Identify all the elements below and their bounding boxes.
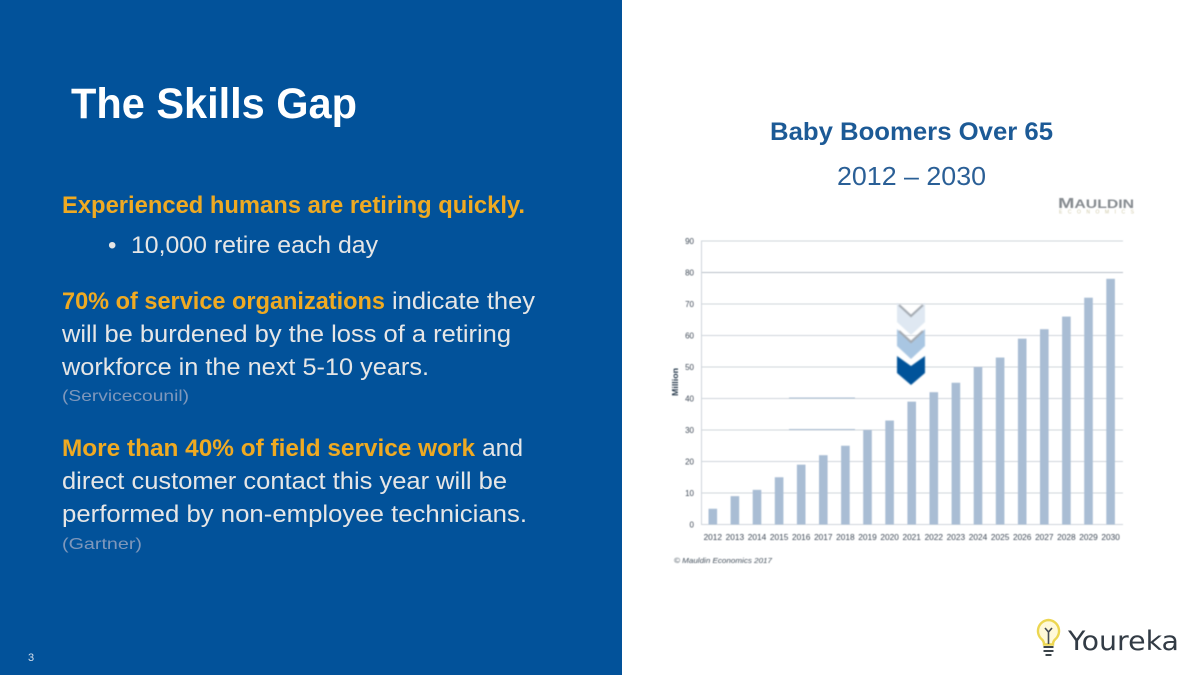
y axis labels: 30 — [685, 426, 695, 435]
text block: service organizations: workforce in the next 5-10 years. — [61, 354, 429, 381]
text block: retiring quickly: • — [108, 232, 116, 259]
y axis labels: 90 — [685, 237, 695, 246]
x axis labels: 2018 — [836, 532, 855, 542]
x axis labels: 2019 — [858, 532, 877, 542]
x axis labels: 2015 — [770, 532, 789, 542]
x axis labels: 2022 — [925, 532, 943, 542]
x axis labels: 2029 — [1079, 532, 1098, 542]
title: The Skills Gap — [71, 80, 357, 128]
y axis labels: 0 — [690, 520, 695, 530]
x axis labels: 2020 — [880, 532, 899, 542]
text block: field service work: and — [482, 435, 523, 462]
chart heading — [770, 118, 1053, 191]
x axis labels: 2014 — [748, 532, 767, 542]
chart copyright: © Mauldin Economics 2017 — [674, 557, 773, 565]
y axis labels — [685, 237, 695, 530]
x axis labels: 2016 — [792, 532, 811, 542]
panel: left blue background — [0, 0, 622, 675]
text block: field service work — [62, 435, 527, 553]
text block: field service work: More than 40% of field service work — [62, 435, 476, 462]
y axis labels: 60 — [685, 332, 695, 340]
x axis labels: 2013 — [726, 532, 745, 542]
x axis labels: 2028 — [1057, 532, 1076, 542]
y axis labels: 70 — [685, 300, 695, 309]
logo: Mauldin Economics: M AULDIN — [1058, 195, 1134, 212]
text block: service organizations: 70% of service organizations — [62, 288, 385, 315]
y axis labels: 40 — [685, 394, 695, 404]
text block: field service work: performed by non-employee technicians. — [62, 501, 527, 528]
y axis labels: 50 — [685, 363, 695, 372]
text block: service organizations — [61, 288, 535, 405]
text block: retiring quickly — [62, 192, 525, 259]
y axis labels: 10 — [685, 489, 695, 498]
chart heading: Baby Boomers Over 65 — [770, 118, 1053, 146]
text block: field service work: direct customer contact this year will be — [62, 468, 507, 495]
x axis labels: 2017 — [814, 532, 833, 542]
x axis labels: 2026 — [1013, 532, 1032, 542]
text block: retiring quickly: 10,000 retire each day — [131, 232, 378, 259]
chart heading: 2012 – 2030 — [837, 161, 986, 191]
x axis labels — [704, 532, 1120, 542]
left panel text — [28, 80, 535, 664]
wordmark: Youreka — [1067, 626, 1179, 657]
text block: retiring quickly: Experienced humans are retiring quickly. — [62, 192, 525, 219]
y axis labels: 20 — [685, 458, 695, 466]
x axis labels: 2030 — [1101, 532, 1120, 542]
x axis labels: 2023 — [947, 532, 966, 542]
x axis labels: 2021 — [902, 532, 921, 542]
text block: service organizations: will be burdened by the loss of a retiring — [61, 321, 511, 348]
text block: service organizations: (Servicecounil) — [62, 388, 189, 405]
y axis title: Million — [671, 368, 680, 396]
text block: field service work: (Gartner) — [62, 536, 142, 553]
grid lines — [701, 241, 1123, 524]
x axis labels: 2024 — [969, 532, 988, 542]
icon: descending chevrons — [897, 303, 925, 385]
logo: Youreka — [1038, 620, 1179, 657]
x axis labels: 2025 — [991, 532, 1010, 542]
bars — [708, 279, 1115, 524]
logo: Mauldin Economics: ECONOMICS — [1059, 210, 1135, 216]
y axis labels: 80 — [685, 268, 695, 278]
page number: 3 — [28, 652, 34, 664]
text block: service organizations: indicate they — [392, 288, 535, 315]
logo: Mauldin Economics — [1058, 195, 1135, 216]
icon: light bulb — [1038, 620, 1059, 656]
x axis labels: 2027 — [1035, 532, 1054, 542]
x axis labels: 2012 — [704, 532, 722, 542]
bar chart: baby boomers over 65, millions — [671, 237, 1123, 565]
